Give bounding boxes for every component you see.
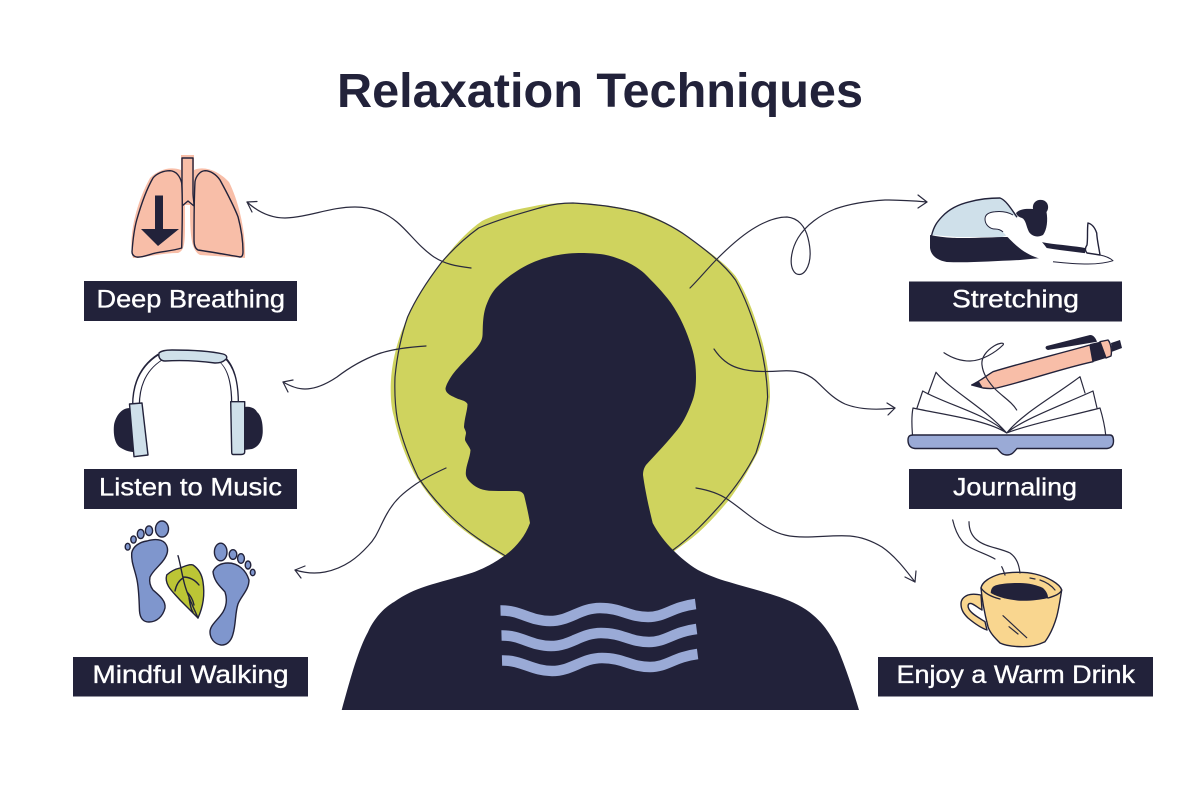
hand-drawn halo outline [395,203,768,556]
arrow: to listen to music [283,346,426,392]
icon: stretching person [930,198,1113,264]
book page lines [912,372,1106,435]
icon: coffee cup with steam [953,520,1062,647]
coffee [991,583,1048,601]
leaf [166,565,204,618]
label: deep breathing [84,281,297,321]
label: stretching [909,282,1122,322]
book cover [908,435,1114,455]
steam [953,520,1020,575]
head and shoulders silhouette [342,253,859,710]
green halo blob [391,203,770,558]
cup handle [961,594,987,630]
label: deep breathing: Deep Breathing [96,286,285,314]
arrow: to journaling [714,349,895,415]
icon: open book and pen [908,335,1122,455]
arrow: to deep breathing [247,202,471,268]
pen [972,345,1093,389]
label: stretching: Stretching [952,286,1079,314]
label: enjoy a warm drink: Enjoy a Warm Drink [896,661,1136,689]
label: mindful walking [73,657,308,696]
arrow: to stretching [690,195,927,288]
book page fill [912,372,1106,436]
label: listen to music [84,469,297,509]
arrow: to warm drink [696,488,916,582]
label: mindful walking: Mindful Walking [92,661,288,689]
arrow: to mindful walking [295,468,446,578]
icon: headphones [114,350,263,457]
cup body [981,572,1062,647]
icon: footprints and leaf [125,521,255,645]
pen squiggle [944,343,1017,410]
icon: down arrow in lung [141,196,179,246]
label: enjoy a warm drink [878,657,1153,696]
label: journaling: Journaling [953,474,1077,502]
calming waves on chest [500,604,698,671]
title: Relaxation Techniques [337,65,863,118]
cup glints [1003,578,1055,638]
icon: lungs [131,155,245,258]
label: listen to music: Listen to Music [99,474,282,502]
label: journaling [909,469,1122,509]
left foot [125,521,168,622]
central figure [342,203,859,710]
right foot [210,543,255,645]
